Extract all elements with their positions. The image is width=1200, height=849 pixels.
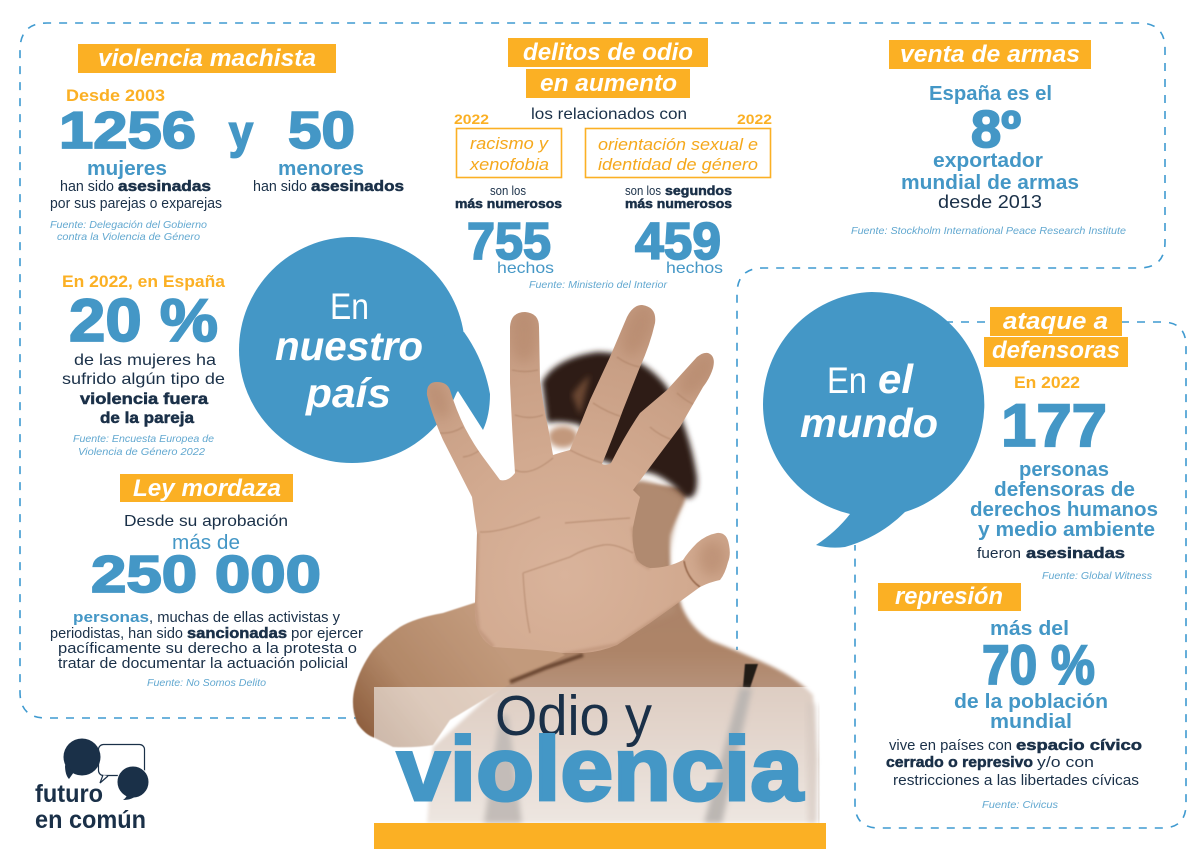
text: menores asesinados: asesinados [311,178,404,195]
number: 70 %: 70 % [982,633,1095,696]
connector: y: y [229,106,253,158]
text: mujeres asesinadas: asesinadas [118,178,211,195]
label: mujeres: mujeres [87,158,167,180]
heading: delitos de odio en aumento: delitos de odio [523,39,693,66]
source: Delegación del Gobierno [50,219,207,243]
text: exportador mundial de armas [901,150,1079,194]
title: Odio y violencia: Odio y [495,684,652,748]
source: No Somos Delito: Fuente: No Somos Delito [147,677,266,689]
text: personas defensoras: derechos humanos [970,499,1158,521]
box: racismo y xenofobia: racismo y [470,134,550,153]
number: 20 %: 20 % [69,287,218,354]
text: fueron asesinadas: fueron [977,545,1021,562]
section: venta de armas [851,40,1126,237]
text: espacio cívico: cerrado o represivo [886,754,1033,771]
text: más numerosos: más numerosos [455,196,562,211]
text: personas sancionadas: pacíficamente su derecho a la protesta o [58,640,357,657]
text: segundos más numerosos: más numerosos [625,196,732,211]
text: personas sancionadas: personas [73,609,149,626]
text: espacio cívico: vive en países con [889,737,1012,754]
heading: ataque a defensoras [984,307,1128,367]
number: 1256: 1256 [59,102,196,160]
text: más numerosos [455,184,562,211]
label: menores: menores [278,158,364,180]
section: Ley mordaza [50,474,363,689]
strap left lower [484,715,522,823]
body side shadows [806,700,818,823]
text: espacio cívico: restricciones a las libertades cívicas [893,772,1139,789]
text: segundos más numerosos: segundos [665,183,732,198]
source: Stockholm: Fuente: Stockholm International Peace Research Institute [851,225,1126,237]
strap right top [743,664,758,688]
box: racismo y xenofobia: xenofobia [469,155,549,174]
text: espacio cívico: espacio cívico [1016,737,1142,754]
section: 20 % mujeres [62,272,226,458]
text: de la población mundial [954,691,1108,733]
speech bubble: En nuestro país: país [305,370,391,416]
face and neck [610,480,684,640]
text: exportador mundial de armas: mundial de armas [901,172,1079,194]
heading: ataque a defensoras: defensoras [992,337,1120,364]
text: personas sancionadas: por ejercer [291,625,363,642]
title: Odio y violencia: violencia [397,720,804,820]
source: Encuesta Europea: Violencia de Género 2022 [78,446,205,458]
logo text [35,780,146,834]
text: espacio cívico: y/o con [1037,754,1094,771]
source: Encuesta Europea [73,433,214,458]
logo text: en común [35,806,146,834]
title: Odio y violencia [397,684,804,820]
heading: venta de armas: venta de armas [900,41,1080,68]
label: más de: más de [172,532,240,554]
text: mujeres violencia: de la pareja [100,410,194,427]
label: más del: más del [990,618,1069,640]
label: En 2022, en España: En 2022, en España [62,272,226,291]
speech bubble: En el mundo: el [878,356,915,402]
text: personas sancionadas [50,609,363,672]
text: personas defensoras: y medio ambiente [978,519,1155,541]
number: 50: 50 [288,102,355,160]
hair [542,352,697,498]
label: hechos: hechos [497,260,554,277]
number: 459: 459 [635,213,721,271]
text: los relacionados con: los relacionados con [531,106,687,123]
section: violencia machista [50,44,404,243]
text: personas defensoras [970,459,1158,541]
forearm [353,602,583,747]
text: segundos más numerosos: son los [625,184,661,198]
text: mujeres violencia [62,352,225,427]
box: racismo y xenofobia [456,128,562,178]
text: España es el: España es el [929,83,1052,105]
year left: 2022 [454,112,489,127]
dashed panel outline: En el mundo [855,322,1186,828]
text: más numerosos: son los [490,184,526,198]
text: exportador mundial de armas: exportador [933,150,1043,172]
section: ataque a defensoras [970,307,1158,582]
source: Ministerio del Interior: Fuente: Ministerio del Interior [529,279,668,291]
text: mujeres asesinadas: por sus parejas o exparejas [50,195,222,212]
title band [374,687,818,823]
speech bubble: En el mundo [763,292,984,548]
source: Delegación del Gobierno: contra la Violencia de Género [57,231,200,243]
logo text: futuro [35,780,103,808]
heading: represión: represión [895,583,1003,610]
box: orientación sexual [586,128,770,178]
text: personas sancionadas: tratar de documentar la actuación policial [58,655,348,672]
logo speech icons [64,738,149,800]
text: mujeres violencia: de las mujeres ha [74,352,216,369]
text: Desde su aprobación: Desde su aprobación [124,513,288,530]
heading: delitos de odio en aumento [508,38,708,98]
speech bubble: En nuestro país [239,237,490,463]
speech bubble: En nuestro país: nuestro [275,323,423,369]
text: desde 2013: desde 2013 [938,192,1042,212]
text: fueron asesinadas [977,545,1125,562]
source: Global Witness: Fuente: Global Witness [1042,570,1153,582]
label: hechos: hechos [666,260,723,277]
text: espacio cívico [886,737,1142,789]
number: 250 000: 250 000 [91,546,321,604]
box: orientación sexual: orientación sexual e [598,135,758,154]
label: Desde 2003: Desde 2003 [66,86,165,105]
number: 8º: 8º [971,101,1021,159]
hair highlight [572,375,590,415]
heading: violencia machista: violencia machista [98,45,316,72]
text: personas sancionadas: periodistas, han sido [50,625,183,642]
dashed panel outline: En nuestro país [20,23,1165,718]
text: de la población mundial: de la población [954,691,1108,713]
text: fueron asesinadas: asesinadas [1026,545,1125,562]
text: mujeres asesinadas: han sido [60,178,114,195]
section: delitos de odio [454,38,772,291]
wrist shadow [510,655,583,682]
text: segundos más numerosos [625,183,732,211]
text: mujeres violencia: sufrido algún tipo de [62,371,225,388]
woman body [427,352,818,823]
heading: delitos de odio en aumento: en aumento [540,70,677,97]
source: Delegación del Gobierno: Fuente: Delegación del Gobierno [50,219,207,231]
text: personas defensoras: personas [1019,459,1109,481]
text: personas sancionadas: sancionadas [187,625,287,642]
number: 177: 177 [1001,392,1107,459]
number: 755: 755 [467,213,551,271]
photo: woman holding up hand [353,299,818,823]
section: represión [878,583,1142,811]
orange footer bar [374,823,826,849]
text: mujeres asesinadas [50,178,222,212]
hand [421,299,730,655]
year right: 2022 [737,112,772,127]
forehead [548,426,578,448]
heading: ataque a defensoras: ataque a [1003,308,1108,335]
box: orientación sexual: identidad de género [598,155,758,174]
heading: Ley mordaza: Ley mordaza [133,475,281,502]
text: personas defensoras: defensoras de [994,479,1135,501]
text: menores asesinados [253,178,404,195]
text: de la población mundial: mundial [990,711,1072,733]
speech bubble: En nuestro país: En [330,286,369,327]
text: menores asesinados: han sido [253,178,307,195]
label: En 2022: En 2022 [1014,373,1080,392]
source: Encuesta Europea: Fuente: Encuesta Europea de [73,433,214,445]
text: personas sancionadas: , muchas de ellas activistas y [149,609,340,626]
text: mujeres violencia: violencia fuera [80,391,208,408]
speech bubble: En el mundo: En [827,360,867,401]
hand shading [421,299,726,655]
strap right lower [704,688,752,823]
speech bubble: En el mundo: mundo [800,400,938,446]
source: Civicus: Fuente: Civicus [982,799,1059,811]
logo: futuro en común [35,738,149,834]
